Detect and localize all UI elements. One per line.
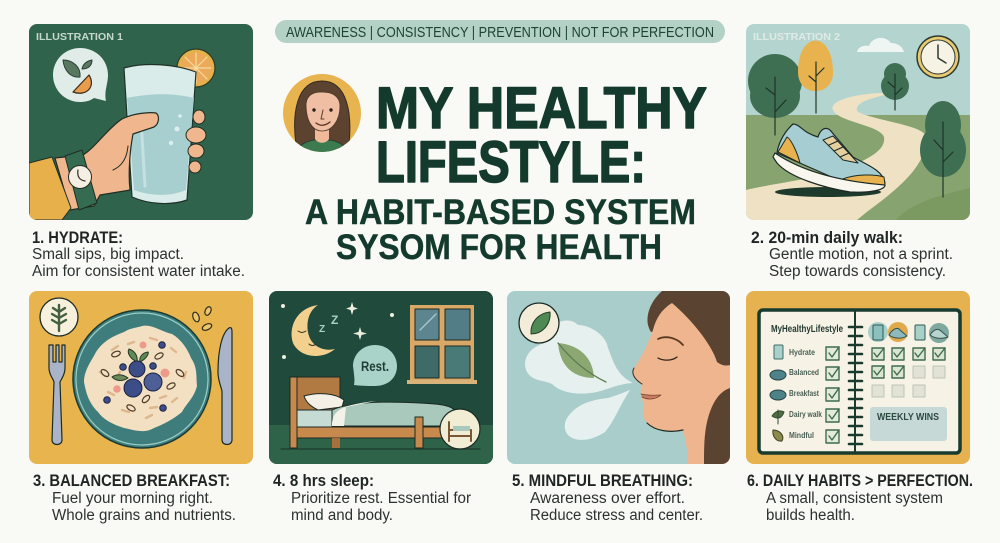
bed: [281, 377, 480, 449]
avatar: smiling woman portrait: [283, 74, 361, 154]
speech bubble: rest: [353, 345, 397, 386]
breath cloud: [525, 321, 633, 440]
notebook spiral: [849, 312, 862, 452]
panel: hydrate illustration: [29, 24, 253, 220]
text block: step 4: Prioritize rest. Essential for: [291, 490, 471, 507]
text block: step 2: 2. 20-min daily walk:: [751, 229, 903, 247]
icon: bed badge: [440, 409, 480, 449]
fork: [49, 345, 65, 444]
speech bubble: rest: Rest.: [361, 359, 389, 374]
text block: step 1: [32, 229, 245, 280]
window: [407, 305, 477, 384]
top banner: values pill: [275, 20, 725, 43]
tracker heading: MyHealthyLifestyle: [771, 323, 843, 335]
empty checkboxes: [872, 366, 945, 397]
cloud: [857, 38, 904, 52]
icon: leaf badge: [519, 303, 559, 343]
right checkboxes: [872, 348, 945, 378]
text block: step 3: [33, 472, 236, 524]
hill: [896, 188, 970, 220]
panel: habit tracker notebook: [746, 291, 970, 464]
text block: step 3: Whole grains and nutrients.: [52, 507, 236, 524]
text block: step 4: 4. 8 hrs sleep:: [273, 472, 374, 490]
knife: [218, 328, 232, 444]
icon: crescent moon with zzz: Z: [319, 324, 325, 335]
panel label: illustration 2: ILLUSTRATION 2: [753, 31, 840, 43]
icon: oats: [191, 306, 213, 332]
icon: lemon slice: [177, 49, 215, 87]
icon: wheat badge: [40, 298, 78, 336]
text block: step 2: Step towards consistency.: [769, 263, 946, 280]
icon: stars: [281, 302, 394, 359]
top banner: values pill: AWARENESS | CONSISTENCY | PREVENTION | NOT FOR PERFECTION: [286, 25, 714, 41]
icon: walking shoe: [773, 124, 885, 197]
weekly wins box: [870, 407, 947, 441]
title: LIFESTYLE:: [376, 130, 646, 195]
text block: step 4: mind and body.: [291, 507, 393, 524]
text block: step 1: Aim for consistent water intake.: [32, 263, 245, 280]
panel: breakfast illustration: [29, 291, 253, 464]
panel label: illustration 1: ILLUSTRATION 1: [36, 31, 123, 43]
subtitle: [305, 193, 696, 267]
title: MY HEALTHY: [376, 76, 707, 141]
tracker row icons: [770, 345, 786, 441]
tracker rows: Dairy walk: [789, 409, 822, 419]
woman face in profile: [633, 291, 730, 464]
panel: walk illustration: [746, 24, 970, 220]
glass of water: [124, 65, 196, 204]
text block: step 1: 1. HYDRATE:: [32, 229, 123, 247]
panel: breathing illustration: [507, 291, 730, 464]
text block: step 6: A small, consistent system: [766, 490, 943, 507]
text block: step 3: 3. BALANCED BREAKFAST:: [33, 472, 230, 490]
text block: step 5: 5. MINDFUL BREATHING:: [512, 472, 693, 490]
weekly wins box: WEEKLY WINS: [877, 412, 939, 423]
text block: step 5: [512, 472, 703, 524]
text block: step 5: Reduce stress and center.: [530, 507, 703, 524]
text block: step 4: [273, 472, 471, 524]
tracker rows: Balanced: [789, 367, 819, 377]
icon: crescent moon with zzz: [292, 305, 338, 356]
text block: step 5: Awareness over effort.: [530, 490, 685, 507]
park path: [746, 93, 927, 220]
tracker rows: Breakfast: [789, 388, 819, 398]
trees: [748, 40, 966, 197]
tracker rows: Mindful: [789, 430, 814, 440]
shirt sleeve: [29, 157, 71, 220]
panel: sleep illustration: [269, 291, 493, 464]
text block: step 3: Fuel your morning right.: [52, 490, 213, 507]
icon: crescent moon with zzz: Z: [331, 313, 338, 327]
oatmeal plate: [73, 310, 211, 448]
text block: step 2: [751, 229, 953, 280]
text block: step 1: Small sips, big impact.: [32, 246, 184, 263]
tracker top icons: [868, 322, 949, 343]
wristwatch: [65, 150, 97, 210]
left checkboxes: [826, 347, 839, 443]
title: [376, 76, 707, 195]
icon: leaf and orange speech bubble: [53, 48, 108, 102]
icon: clock: [917, 36, 959, 78]
text block: step 6: builds health.: [766, 507, 855, 524]
subtitle: A HABIT-BASED SYSTEM: [305, 193, 696, 232]
text block: step 6: [747, 472, 973, 524]
text block: step 2: Gentle motion, not a sprint.: [769, 246, 953, 263]
tracker rows: [789, 347, 822, 440]
subtitle: SYSOM FOR HEALTH: [336, 228, 662, 267]
tracker rows: Hydrate: [789, 347, 815, 357]
icon: floating leaf: [558, 343, 606, 382]
hand holding glass: [55, 110, 206, 210]
